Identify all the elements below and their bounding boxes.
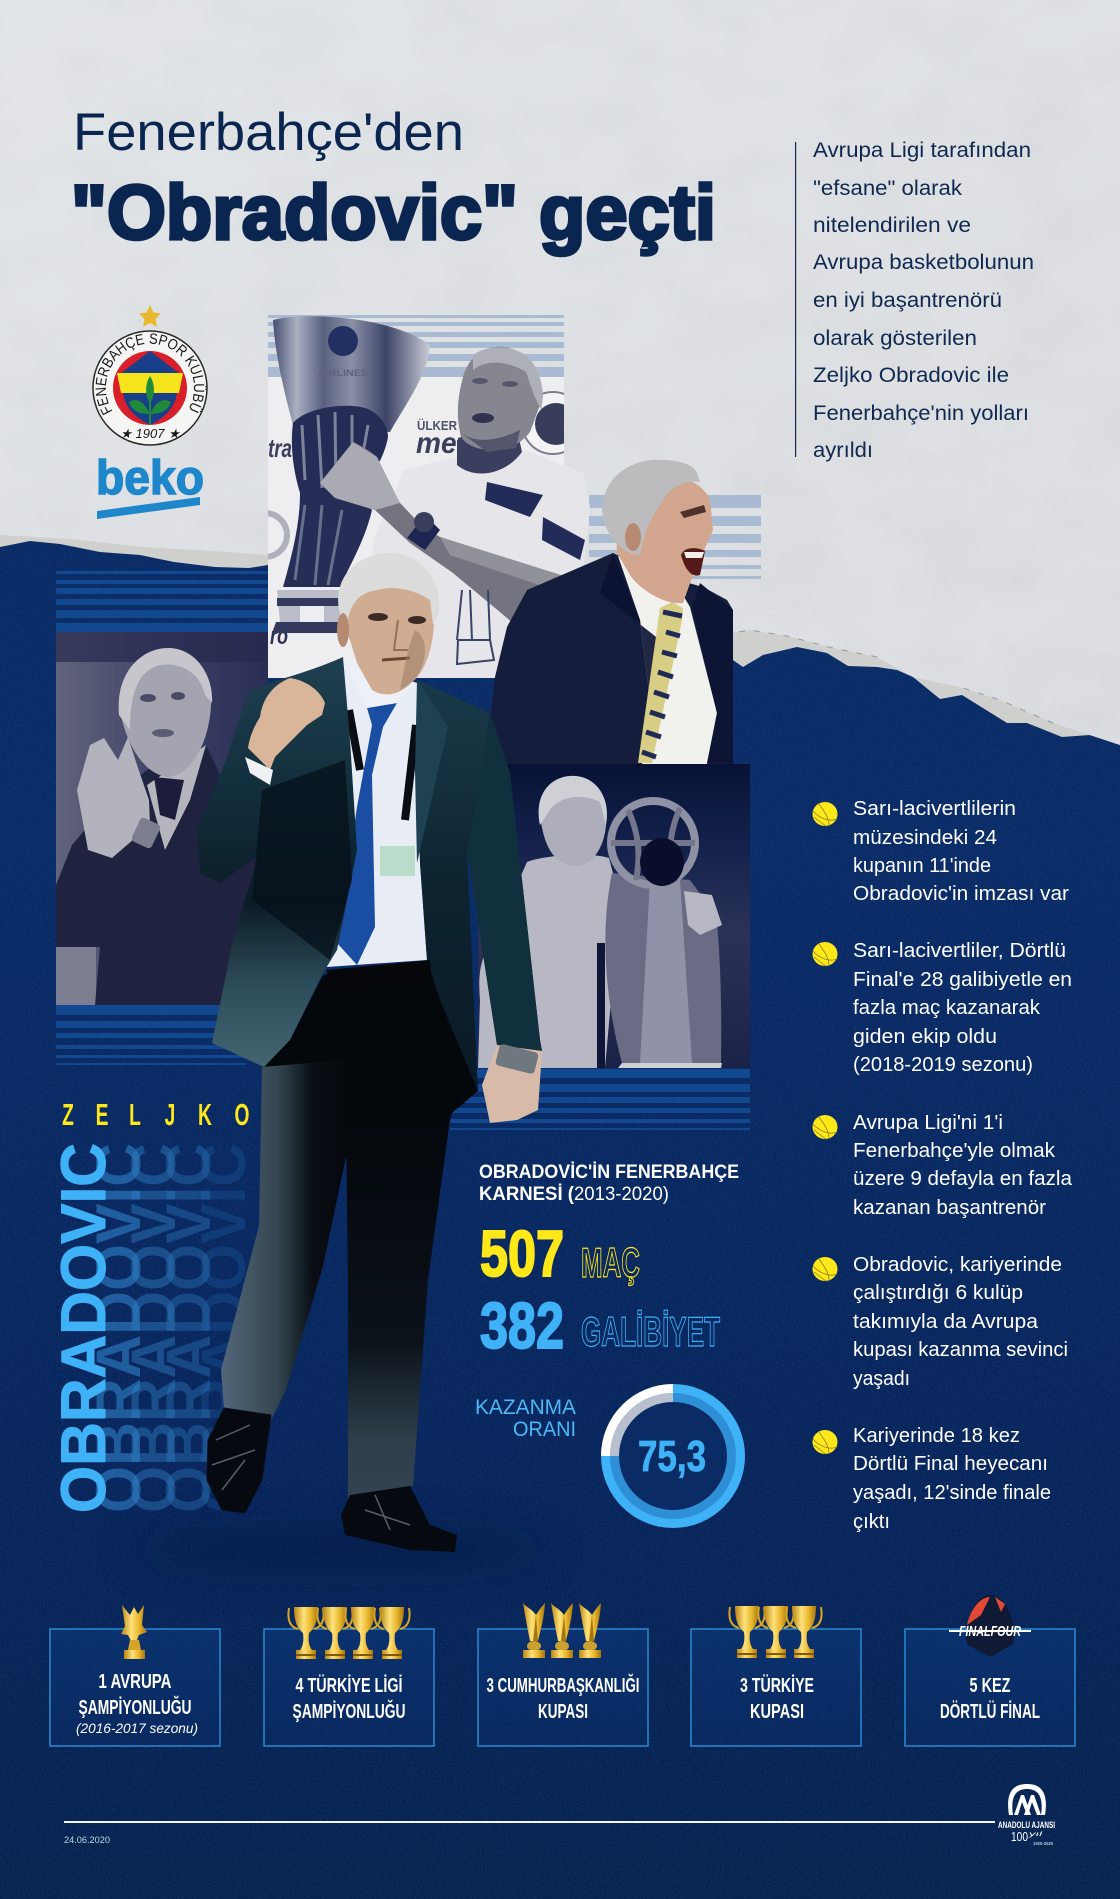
fact 2: Sarı-lacivertliler, Dörtlü <box>853 940 1066 962</box>
OBRADOVIC vertical name with echoes: OBRADOVIC <box>119 1143 189 1513</box>
logo: beko: beko <box>96 452 204 505</box>
small trophy drawing on shirt <box>457 590 494 664</box>
record heading: OBRADOVİC'İN FENERBAHÇE <box>479 1162 739 1183</box>
icon: three spike trophies <box>523 1603 601 1658</box>
record heading <box>479 1162 739 1205</box>
card: European championship: 1 AVRUPA <box>98 1671 172 1693</box>
sponsor wall text <box>268 391 564 644</box>
stat: 507 matches <box>480 1217 640 1290</box>
OBRADOVIC vertical name with echoes: OBRADOVIC <box>84 1143 154 1513</box>
title: "Obradovic" geçti <box>71 170 716 256</box>
logo: Anadolu Ajansı: ANADOLU AJANSI <box>998 1820 1055 1831</box>
fact 4: takımıyla da Avrupa <box>853 1311 1039 1333</box>
clapping hands <box>77 737 150 858</box>
fact 2: (2018-2019 sezonu) <box>853 1054 1033 1076</box>
card: Turkish Cups: 3 TÜRKİYE <box>740 1674 814 1697</box>
fact 4 <box>812 1254 1068 1390</box>
trophy <box>272 316 430 633</box>
man's shirt <box>478 855 620 1068</box>
card: European championship: (2016-2017 sezonu) <box>76 1720 198 1736</box>
fact 5: Kariyerinde 18 kez <box>853 1425 1020 1447</box>
intro paragraph: Avrupa basketbolunun <box>813 251 1034 274</box>
fact 5: Dörtlü Final heyecanı <box>853 1453 1048 1475</box>
raised fist <box>245 678 325 785</box>
stat: 507 matches: MAÇ <box>581 1239 640 1286</box>
fact 3: Avrupa Ligi'ni 1'i <box>853 1112 1003 1134</box>
belt <box>327 960 432 992</box>
ZELJKO name: L <box>129 1099 141 1132</box>
intro paragraph: Zeljko Obradovic ile <box>813 364 1009 387</box>
photo: Obradovic lifting the EuroLeague trophy <box>243 316 590 678</box>
card: Turkish league championships: ŞAMPİYONLUĞU <box>292 1699 406 1723</box>
shirt <box>327 660 427 967</box>
man's head <box>541 777 606 866</box>
man's shirt <box>370 450 590 678</box>
date: 24.06.2020 <box>64 1835 110 1846</box>
stat: 507 matches: 507 <box>480 1217 564 1290</box>
intro paragraph: olarak gösterilen <box>813 327 977 350</box>
man's arm and hand on trophy <box>320 442 567 640</box>
card: Turkish league championships: 4 TÜRKİYE LİGİ <box>296 1674 402 1697</box>
win rate donut: 75,3 <box>638 1432 706 1481</box>
fact 4: Obradovic, kariyerinde <box>853 1254 1062 1276</box>
fact 5 <box>812 1425 1051 1533</box>
icon: star trophy <box>121 1605 147 1659</box>
card: Final Four appearances <box>905 1595 1075 1746</box>
card: Presidential Cups <box>478 1603 648 1746</box>
title <box>71 103 716 256</box>
icon: Final Four logo: FINALFOUR <box>959 1623 1021 1640</box>
fact 4: yaşadı <box>853 1368 910 1390</box>
trousers <box>221 960 478 1500</box>
intro paragraph: nitelendirilen ve <box>813 214 971 237</box>
card: Turkish Cups: KUPASI <box>750 1701 804 1723</box>
fact 4: çalıştırdığı 6 kulüp <box>853 1282 1023 1304</box>
sponsor wall text: ro <box>270 623 288 650</box>
lanyard and badge <box>349 710 416 876</box>
icon: three cups <box>729 1606 822 1658</box>
tie <box>337 703 397 965</box>
right shoe <box>341 1486 457 1552</box>
shirt sponsor tags <box>485 482 585 560</box>
background: torn light paper <box>0 0 1120 750</box>
win rate label: ORANI <box>513 1418 576 1441</box>
win rate label: KAZANMA <box>475 1396 576 1419</box>
logo: Fenerbahçe crest with star: FENERBAHÇE SPOR KULÜBÜ <box>96 333 206 416</box>
fact 3: Fenerbahçe'yle olmak <box>853 1140 1056 1162</box>
lower hand with watch <box>482 1043 542 1123</box>
facts list <box>812 798 1073 1533</box>
stripes: blue, upper left <box>56 571 268 632</box>
fact 5: yaşadı, 12'sinde finale <box>853 1482 1051 1504</box>
head <box>337 553 439 708</box>
OBRADOVIC vertical name with echoes <box>49 1143 259 1513</box>
fact 2 <box>812 940 1072 1076</box>
stripes: blue, lower right <box>450 1069 750 1130</box>
icon: four trophies <box>288 1607 410 1659</box>
win rate label <box>475 1396 576 1441</box>
main figure: Zeljko Obradovic walking <box>130 553 550 1572</box>
record heading: KARNESİ (2013-2020) <box>479 1184 669 1205</box>
clapping man's head <box>119 649 211 777</box>
stripes: blue, lower left <box>56 1005 246 1065</box>
fact 2: Final'e 28 galibiyetle en <box>853 969 1072 991</box>
logo: Fenerbahçe crest with star <box>92 305 208 446</box>
sponsor wall text: ÜLKER <box>417 418 458 433</box>
intro paragraph <box>795 139 1034 462</box>
logo: Anadolu Ajansı: yıl <box>1027 1832 1043 1838</box>
man's neck and head <box>457 347 543 474</box>
card: Final Four appearances: 5 KEZ <box>970 1675 1010 1697</box>
intro paragraph: en iyi başantrenörü <box>813 289 1002 312</box>
fact 4: kupası kazanma sevinci <box>853 1339 1068 1361</box>
fact 1: Obradovic'in imzası var <box>853 883 1069 905</box>
stat: 382 wins: 382 <box>480 1289 564 1362</box>
trophy: AIRLINES <box>318 368 368 378</box>
stat: 382 wins: GALİBİYET <box>581 1308 720 1355</box>
logo: Anadolu Ajansı <box>998 1784 1055 1846</box>
ZELJKO name: E <box>96 1099 108 1132</box>
coach head <box>617 477 713 603</box>
fact 5: çıktı <box>853 1511 890 1533</box>
card: European championship: ŞAMPİYONLUĞU <box>78 1695 192 1719</box>
left shoe <box>207 1408 271 1513</box>
fact 3: kazanan başantrenör <box>853 1197 1046 1219</box>
fact 1: kupanın 11'inde <box>853 855 991 877</box>
OBRADOVIC vertical name with echoes: OBRADOVIC <box>189 1143 259 1513</box>
title: Fenerbahçe'den <box>73 103 464 162</box>
ZELJKO name: O <box>235 1099 249 1132</box>
fact 2: fazla maç kazanarak <box>853 997 1041 1019</box>
stripes: light, behind trophy photo <box>268 315 564 377</box>
floor shadow <box>130 1528 550 1572</box>
intro paragraph: Avrupa Ligi tarafından <box>813 139 1031 162</box>
intro paragraph: "efsane" olarak <box>813 177 963 200</box>
intro paragraph: ayrıldı <box>813 439 873 462</box>
ZELJKO name <box>62 1099 249 1132</box>
ZELJKO name: Z <box>62 1099 74 1132</box>
fact 3 <box>812 1112 1073 1219</box>
card: Presidential Cups: 3 CUMHURBAŞKANLIĞI <box>486 1673 640 1697</box>
jacket <box>197 657 357 1067</box>
fact 2: giden ekip oldu <box>853 1026 997 1048</box>
card: Turkish league championships <box>264 1607 434 1746</box>
icon: Final Four logo <box>949 1595 1031 1657</box>
fact 1: müzesindeki 24 <box>853 827 997 849</box>
card: Presidential Cups: KUPASI <box>538 1701 588 1723</box>
photo: shouting coach in navy suit <box>485 460 733 764</box>
card: European championship <box>50 1605 220 1746</box>
win rate donut <box>601 1384 745 1528</box>
OBRADOVIC vertical name with echoes: OBRADOVIC <box>49 1143 119 1513</box>
logo: Anadolu Ajansı: 100 <box>1011 1829 1028 1844</box>
intro paragraph: Fenerbahçe'nin yolları <box>813 402 1029 425</box>
logo: Anadolu Ajansı: 1920-2020 <box>1033 1841 1053 1846</box>
stat: 382 wins <box>480 1289 720 1362</box>
trophy <box>605 801 722 1068</box>
clapping man's jacket <box>56 745 256 1005</box>
sponsor wall text: met <box>416 427 468 460</box>
footer rule <box>64 1821 995 1823</box>
ZELJKO name: K <box>198 1099 212 1132</box>
fact 1: Sarı-lacivertlilerin <box>853 798 1016 820</box>
fact 3: üzere 9 defayla en fazla <box>853 1168 1073 1190</box>
sponsor wall text: tra <box>268 433 292 463</box>
background: navy grain <box>0 530 1120 1899</box>
photo: Obradovic with trophy, tinted <box>478 764 750 1068</box>
photo: clapping Obradovic, tinted <box>56 632 268 1005</box>
OBRADOVIC vertical name with echoes: OBRADOVIC <box>154 1143 224 1513</box>
logo: Fenerbahçe crest with star: ★ 1907 ★ <box>120 426 181 441</box>
ZELJKO name: J <box>165 1099 175 1132</box>
card: Turkish Cups <box>691 1606 861 1746</box>
card: Final Four appearances: DÖRTLÜ FİNAL <box>940 1700 1040 1723</box>
stripes: light, behind shouting coach <box>589 495 761 579</box>
fact 1 <box>812 798 1069 905</box>
